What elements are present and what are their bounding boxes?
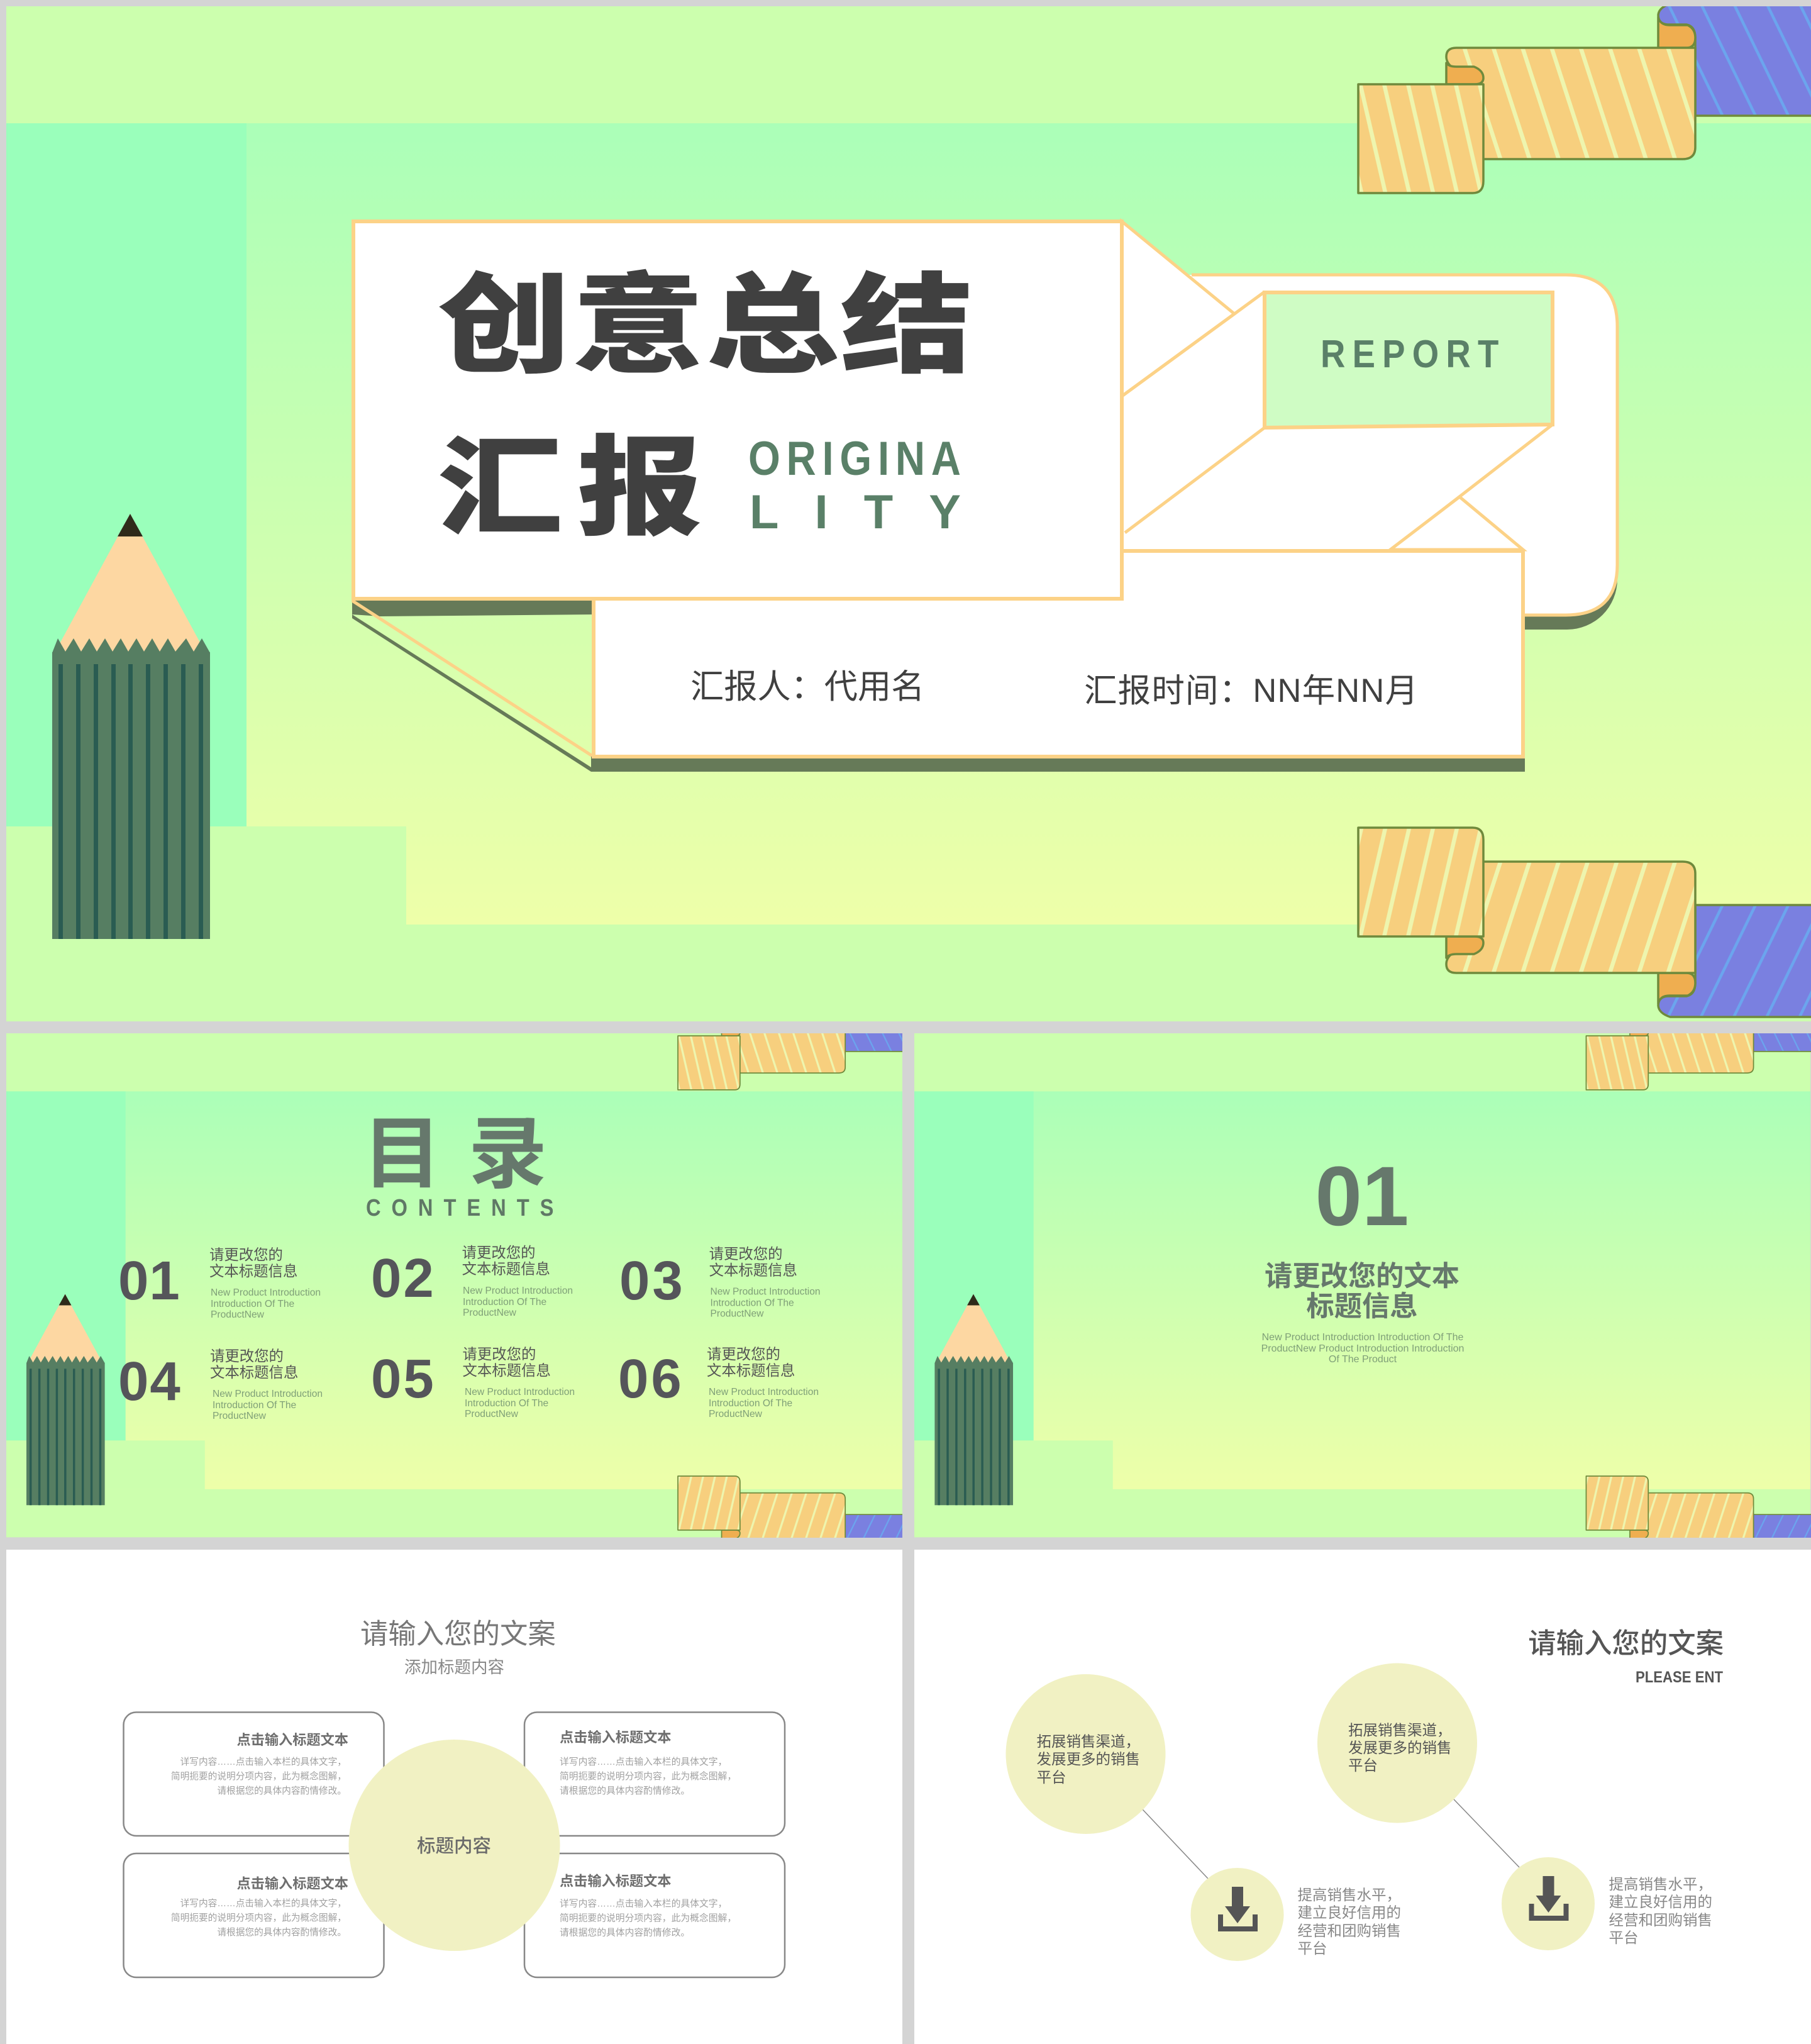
item 03: 文本标题信息 <box>709 1262 797 1278</box>
large circle left: 平台 <box>1036 1769 1066 1786</box>
item 02: New Product Introduction <box>463 1286 573 1296</box>
item 01: 01 <box>118 1250 180 1311</box>
ribbon bottom <box>1586 1476 1811 1570</box>
card bottom left <box>123 1853 384 1977</box>
ribbon top <box>1586 996 1811 1090</box>
card top left: 请根据您的具体内容酌情修改。 <box>217 1786 346 1796</box>
item 06: Introduction Of The <box>709 1398 792 1409</box>
item 02: 02 <box>371 1248 436 1309</box>
item 01: New Product Introduction <box>211 1287 321 1298</box>
item 03: 请更改您的 <box>709 1245 783 1262</box>
item 01: ProductNew <box>211 1309 265 1320</box>
section heading <box>1265 1261 1459 1322</box>
card top right: 详写内容……点击输入本栏的具体文字， <box>560 1757 727 1767</box>
title <box>438 265 975 549</box>
item 02 <box>371 1244 573 1318</box>
subtitle ORIGINALITY <box>750 442 960 528</box>
item 05: 请更改您的 <box>463 1346 536 1362</box>
card bottom right: 简明扼要的说明分项内容，此为概念图解， <box>560 1912 736 1923</box>
icon: pencil <box>52 514 210 939</box>
note right: 经营和团购销售 <box>1609 1912 1712 1928</box>
ribbon top right <box>1358 4 1811 193</box>
card bottom right: 请根据您的具体内容酌情修改。 <box>560 1927 690 1938</box>
card bottom right <box>524 1853 785 1977</box>
item 05: ProductNew <box>465 1409 519 1419</box>
item 02: Introduction Of The <box>463 1297 546 1308</box>
item 03: Introduction Of The <box>711 1298 794 1308</box>
note right: 建立良好信用的 <box>1609 1894 1712 1910</box>
subheading: 添加标题内容 <box>404 1658 504 1677</box>
card bottom right: 详写内容……点击输入本栏的具体文字， <box>560 1898 727 1909</box>
section heading: 请更改您的文本 <box>1265 1261 1459 1292</box>
note left: 提高销售水平， <box>1298 1887 1401 1903</box>
item 04: 请更改您的 <box>210 1348 284 1364</box>
center circle: 标题内容 <box>417 1836 491 1857</box>
item 06 <box>618 1346 819 1419</box>
item 05 <box>371 1346 575 1419</box>
large circle left <box>1006 1674 1166 1834</box>
cover background <box>6 6 1811 1021</box>
subtitle ORIGINALITY: ORIGINA <box>748 432 961 486</box>
ribbon top <box>678 996 972 1090</box>
reporter name: 汇报人：代用名 <box>690 669 924 706</box>
card top right <box>524 1712 785 1836</box>
note right: 平台 <box>1609 1930 1639 1946</box>
item 04: ProductNew <box>213 1411 267 1421</box>
item 02: 请更改您的 <box>462 1244 536 1260</box>
item 04 <box>118 1348 323 1421</box>
center circle <box>348 1740 560 1951</box>
item 06: New Product Introduction <box>709 1387 819 1397</box>
item 06: 文本标题信息 <box>707 1362 795 1379</box>
card top left <box>123 1712 384 1836</box>
item 03: 03 <box>619 1250 685 1311</box>
connector line right <box>1454 1799 1519 1867</box>
item 01: 文本标题信息 <box>209 1263 297 1279</box>
panel: slide 5 sales channels <box>914 1550 1811 2044</box>
title: 创意总结 <box>438 265 975 387</box>
heading: 请输入您的文案 <box>360 1619 556 1650</box>
item 01 <box>118 1247 321 1320</box>
subheading: PLEASE ENT <box>1636 1669 1723 1686</box>
icon: pencil small <box>26 1294 105 1505</box>
large circle left: 发展更多的销售 <box>1036 1751 1140 1767</box>
card bottom right: 点击输入标题文本 <box>560 1873 672 1889</box>
item 01: 请更改您的 <box>209 1247 283 1263</box>
card top left: 点击输入标题文本 <box>236 1732 348 1748</box>
item 04: New Product Introduction <box>213 1389 323 1399</box>
section description: New Product Introduction Introduction Of The <box>1262 1332 1463 1343</box>
panel: slide 3 section <box>914 996 1811 1570</box>
card top left: 详写内容……点击输入本栏的具体文字， <box>180 1757 346 1767</box>
icon: download left <box>1191 1868 1284 1961</box>
card bottom left: 详写内容……点击输入本栏的具体文字， <box>180 1898 346 1909</box>
report time: 汇报时间：NN年NN月 <box>1084 672 1418 709</box>
card bottom left: 请根据您的具体内容酌情修改。 <box>217 1927 346 1938</box>
item 06: 06 <box>618 1348 684 1409</box>
item 04: 04 <box>118 1351 182 1412</box>
item 05: Introduction Of The <box>465 1398 548 1409</box>
item 03 <box>619 1245 821 1319</box>
section heading: 标题信息 <box>1306 1291 1418 1322</box>
item 02: ProductNew <box>463 1308 517 1318</box>
note right: 提高销售水平， <box>1609 1876 1712 1892</box>
label REPORT: REPORT <box>1321 333 1499 376</box>
item 06: ProductNew <box>709 1409 763 1419</box>
heading contents: 目录 <box>363 1111 574 1198</box>
card top right: 点击输入标题文本 <box>560 1730 672 1745</box>
card top right: 请根据您的具体内容酌情修改。 <box>560 1786 690 1796</box>
section number: 01 <box>1315 1150 1409 1243</box>
icon: download right <box>1502 1857 1595 1950</box>
item 05: 文本标题信息 <box>463 1362 551 1379</box>
large circle right: 发展更多的销售 <box>1348 1740 1451 1756</box>
item 03: ProductNew <box>711 1308 764 1319</box>
ribbon bottom right <box>1358 828 1811 1017</box>
card bottom left: 简明扼要的说明分项内容，此为概念图解， <box>171 1912 346 1923</box>
section background <box>914 1033 1810 1537</box>
contents background <box>6 1033 902 1537</box>
item 03: New Product Introduction <box>711 1287 821 1297</box>
title: 汇报 <box>438 427 717 549</box>
folded paper banner <box>352 221 1617 772</box>
note left: 平台 <box>1298 1940 1327 1957</box>
item 06: 请更改您的 <box>707 1346 780 1362</box>
panel: slide 4 concept diagram <box>6 1550 902 2044</box>
icon: pencil small <box>934 1294 1013 1505</box>
section description: ProductNew Product Introduction Introduction <box>1261 1343 1464 1354</box>
item 02: 文本标题信息 <box>462 1260 550 1277</box>
card bottom left: 点击输入标题文本 <box>236 1875 348 1892</box>
large circle right: 平台 <box>1348 1757 1378 1774</box>
note left: 建立良好信用的 <box>1298 1904 1401 1921</box>
subtitle ORIGINALITY: LITY <box>750 486 961 539</box>
panel: slide 1 cover <box>6 4 1811 1021</box>
card top right: 简明扼要的说明分项内容，此为概念图解， <box>560 1770 736 1782</box>
note left: 经营和团购销售 <box>1298 1923 1401 1939</box>
card top left: 简明扼要的说明分项内容，此为概念图解， <box>171 1770 346 1782</box>
section description: Of The Product <box>1329 1354 1397 1365</box>
panel: slide 2 contents <box>6 996 972 1570</box>
heading: 请输入您的文案 <box>1528 1628 1724 1659</box>
note right <box>1609 1876 1712 1946</box>
note left <box>1298 1887 1401 1957</box>
item 05: New Product Introduction <box>465 1387 575 1397</box>
item 04: Introduction Of The <box>213 1400 296 1411</box>
heading contents: CONTENTS <box>366 1194 553 1221</box>
ribbon bottom <box>678 1476 972 1570</box>
item 01: Introduction Of The <box>211 1299 294 1309</box>
item 05: 05 <box>371 1348 436 1409</box>
large circle right: 拓展销售渠道， <box>1348 1722 1451 1738</box>
large circle right <box>1317 1663 1477 1823</box>
section description <box>1261 1332 1464 1365</box>
connector line left <box>1143 1809 1208 1879</box>
item 04: 文本标题信息 <box>210 1364 298 1380</box>
large circle left: 拓展销售渠道， <box>1036 1733 1140 1750</box>
